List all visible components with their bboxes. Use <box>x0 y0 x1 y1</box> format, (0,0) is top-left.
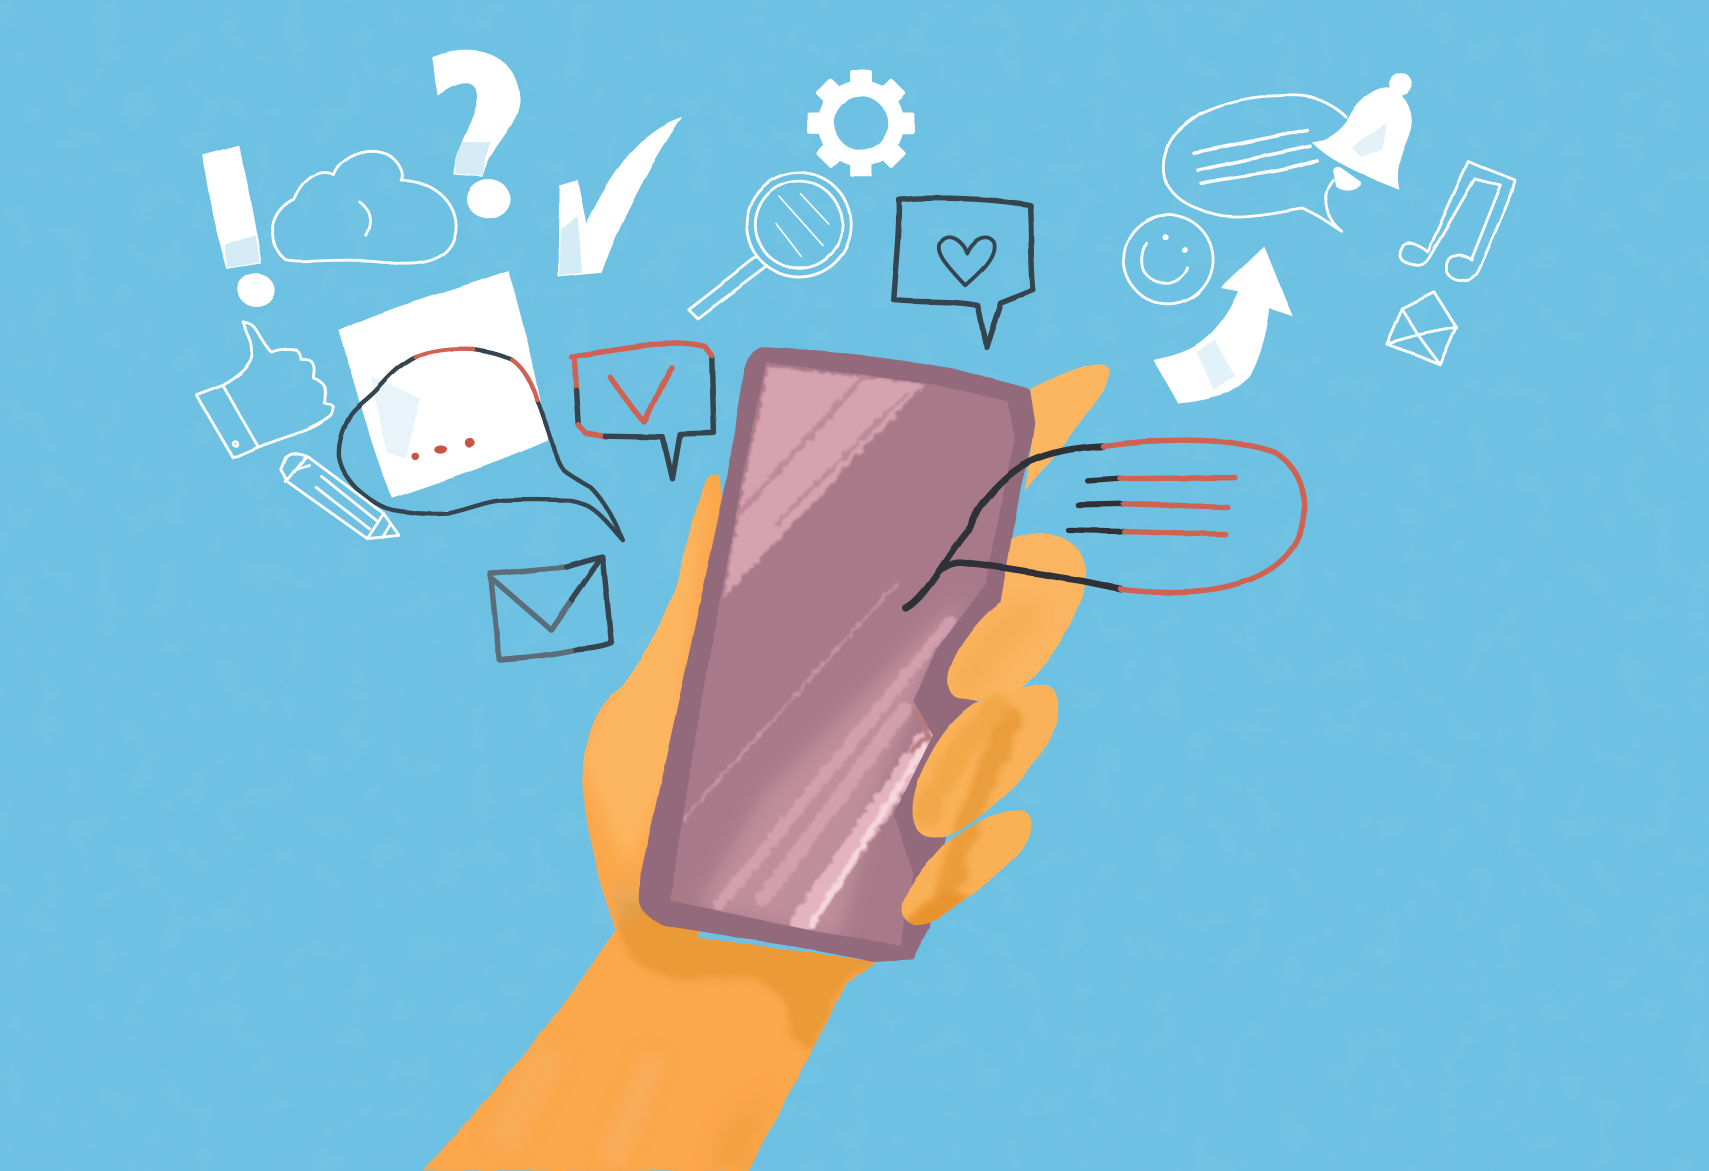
finger shadows <box>900 616 1025 932</box>
icon: heart speech bubble <box>894 198 1033 347</box>
icon: up arrow <box>1153 247 1293 403</box>
icon: question mark <box>432 50 520 218</box>
icon: smiley <box>1124 215 1213 304</box>
icon: thumbs up <box>196 322 334 458</box>
screen reflections <box>683 366 965 938</box>
icon: cloud <box>273 151 456 264</box>
icon: open envelope <box>1386 292 1456 364</box>
icon: white note square <box>339 271 548 498</box>
icon: large speech bubble <box>339 349 622 540</box>
illustration: hand holding phone <box>195 50 1516 1171</box>
thumb <box>1025 364 1110 492</box>
finger 3 <box>902 810 1032 926</box>
wrist shadow <box>617 899 876 1050</box>
hand: thumb and fingers <box>900 364 1110 932</box>
icon: check mark <box>558 117 682 277</box>
hand: arm and palm <box>423 469 876 1171</box>
finger 1 <box>948 533 1086 702</box>
white and dark icons <box>196 50 1515 660</box>
finger 2 <box>913 684 1059 838</box>
icon: music note <box>1399 162 1515 281</box>
icon: pencil <box>281 454 399 539</box>
icon: closed envelope <box>490 557 611 660</box>
palm tint <box>582 490 704 862</box>
icon: bell <box>1311 73 1412 191</box>
icon: speech bubble with lines <box>1163 95 1346 231</box>
icon: speech bubble from phone <box>906 440 1305 608</box>
icon: gear <box>808 70 914 177</box>
icon: exclamation mark <box>203 145 275 306</box>
arm light strokes <box>500 1047 553 1147</box>
phone <box>639 347 1035 962</box>
icon: check speech bubble <box>571 343 714 479</box>
icon: magnifying glass <box>689 172 851 318</box>
